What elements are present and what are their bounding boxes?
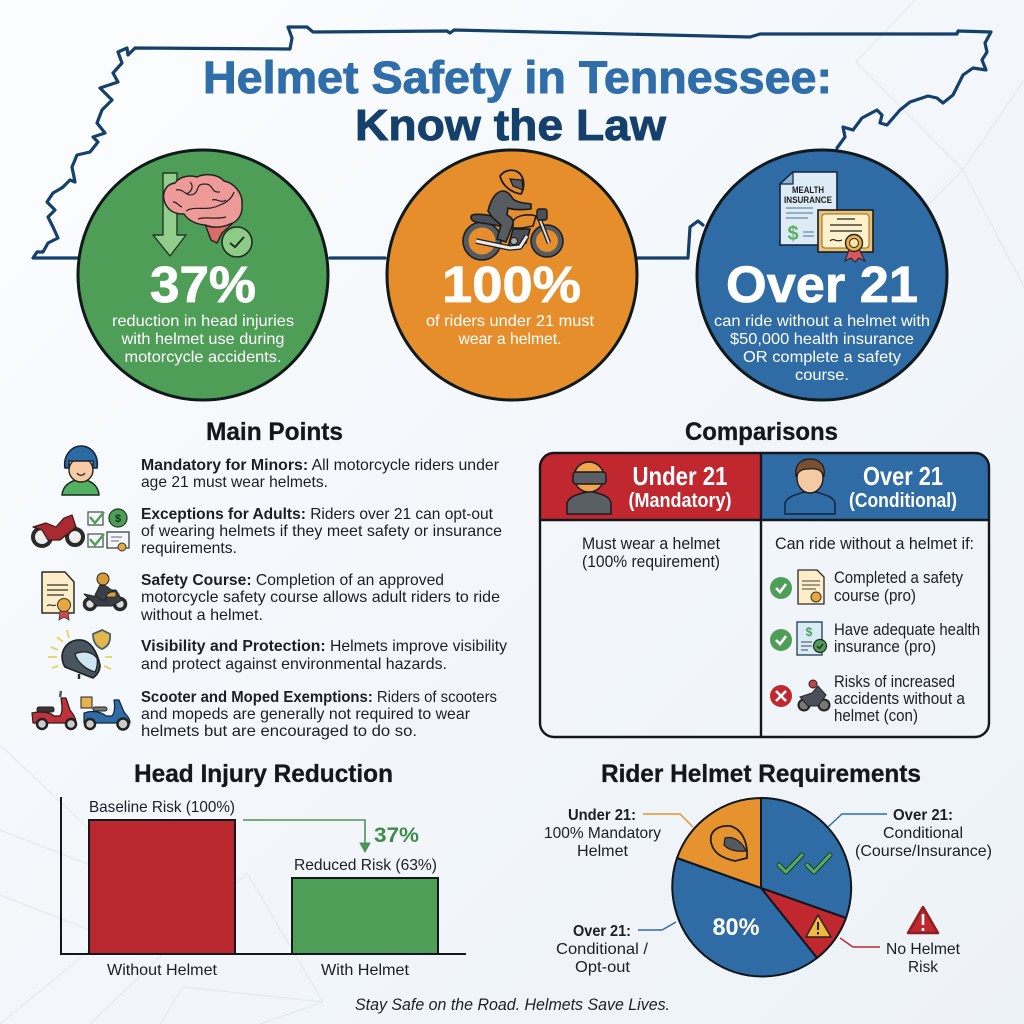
- bar: with helmet: [292, 878, 438, 954]
- text: scooter and moped exemptions: [141, 689, 497, 740]
- text: scooter and moped exemptions: helmets but are encouraged to do so.: [141, 723, 417, 740]
- row: health insurance pro: Have adequate health: [834, 621, 980, 639]
- row: health insurance pro: $: [806, 625, 813, 639]
- icon: rider over 21: [785, 459, 835, 514]
- label: no helmet risk: Risk: [908, 959, 939, 976]
- stat circle: Over 21: [697, 150, 947, 400]
- caption: motorcycle accidents.: [124, 349, 282, 366]
- title: Know the Law: [355, 101, 667, 150]
- caption: can ride without a helmet with: [714, 313, 930, 330]
- icon: health insurance document: INSURANCE: [784, 195, 832, 205]
- bar: without helmet: [89, 820, 235, 954]
- text: must wear a helmet: Must wear a helmet: [582, 535, 720, 553]
- column header: under 21: (Mandatory): [628, 490, 732, 512]
- stat circle: 37%: [78, 150, 328, 400]
- icon: certificate and rider: [42, 572, 126, 620]
- slice: no helmet risk: [761, 888, 846, 958]
- label: over 21 course and insurance: Over 21:: [893, 807, 953, 824]
- text: exceptions for adults: of wearing helmets if they meet safety or insurance: [141, 523, 502, 540]
- slice: over 21 course and insurance: [761, 798, 851, 918]
- label: no helmet risk: No Helmet: [886, 941, 961, 958]
- icon: health insurance document: [780, 172, 837, 245]
- icon: motorcycle with checklist: [33, 509, 129, 551]
- heading: comparisons: Comparisons: [685, 418, 838, 446]
- slice: under 21: [677, 798, 761, 888]
- label: baseline risk: Baseline Risk (100%): [89, 799, 235, 816]
- icon: motorcycle with checklist: $: [115, 513, 121, 525]
- figure: 37%: 37%: [150, 256, 256, 313]
- caption: wear a helmet.: [458, 331, 562, 348]
- text: must wear a helmet: (100% requirement): [582, 553, 720, 571]
- heading: rider helmet requirements: Rider Helmet Requirements: [601, 760, 921, 788]
- text: mandatory for minors: [141, 457, 500, 491]
- column header: over 21: (Conditional): [849, 490, 957, 512]
- title: [203, 52, 832, 150]
- caption: $50,000 health insurance: [730, 331, 914, 348]
- label: over 21 opt-out: [556, 922, 676, 976]
- icon: brain: [164, 175, 242, 243]
- text: mandatory for minors: age 21 must wear helmets.: [141, 474, 328, 491]
- row: safety course pro: [770, 569, 964, 605]
- panel: comparison table: [540, 453, 989, 737]
- row: health insurance pro: [770, 621, 980, 656]
- text: exceptions for adults: [141, 506, 502, 557]
- row: increased accidents con: Risks of increased: [834, 673, 955, 691]
- label: under 21: Helmet: [577, 843, 629, 860]
- icon: check badge: [222, 227, 252, 257]
- text: safety course: without a helmet.: [140, 607, 263, 624]
- text: scooter and moped exemptions: and mopeds are generally not required to wear: [141, 706, 471, 723]
- title: Helmet Safety in Tennessee:: [203, 52, 832, 103]
- figure: 100%: 100%: [442, 256, 581, 313]
- icon: rider under 21: [567, 462, 611, 514]
- stat circle: 100%: [387, 150, 637, 400]
- caption: reduction in head injuries: [112, 313, 294, 330]
- column header: over 21: Over 21: [863, 461, 943, 491]
- caption: course.: [795, 367, 849, 384]
- arrow: reduction: [243, 820, 370, 852]
- caption: [426, 313, 595, 348]
- heading: main points: Main Points: [206, 418, 343, 446]
- label: without helmet: Without Helmet: [107, 962, 218, 979]
- pie chart: rider helmet requirements: [544, 798, 992, 976]
- column header: under 21: Under 21: [632, 461, 728, 491]
- slice: over 21 opt-out: [672, 858, 817, 976]
- icon: rider with blue helmet: [62, 446, 99, 495]
- icon: helmet with shield: [48, 630, 112, 679]
- caption: of riders under 21 must: [426, 313, 595, 330]
- label: reduced risk: Reduced Risk (63%): [294, 857, 437, 874]
- icon: scooters: [32, 691, 130, 730]
- column header: under 21: [628, 461, 732, 512]
- row: increased accidents con: helmet (con): [834, 707, 918, 725]
- row: safety course pro: course (pro): [834, 587, 916, 605]
- row: safety course pro: Completed a safety: [834, 569, 964, 587]
- icon: down arrow: [153, 173, 186, 256]
- panel: main points: [32, 418, 507, 740]
- icon: small warning: [806, 915, 831, 937]
- label: over 21 opt-out: Opt-out: [575, 959, 631, 976]
- caption: [112, 313, 294, 366]
- text: visibility and protection: and protect against environmental hazards.: [141, 656, 447, 673]
- label: over 21 opt-out: Conditional /: [556, 941, 649, 958]
- column header: over 21: [849, 461, 957, 512]
- label: 37%: 37%: [374, 824, 419, 847]
- label: over 21 opt-out: Over 21:: [573, 923, 631, 940]
- text: must wear a helmet: [582, 535, 720, 571]
- text: safety course: Safety Course: Completion of an approved: [141, 572, 444, 589]
- footer tagline: Stay Safe on the Road. Helmets Save Lives.: [355, 995, 670, 1014]
- icon: large warning: [908, 907, 938, 933]
- icon: health insurance document: MEALTH: [792, 185, 824, 195]
- text: can ride without a helmet if: Can ride without a helmet if:: [775, 535, 974, 553]
- label: no helmet risk: [840, 938, 961, 976]
- icon: helmet in slice: [711, 826, 747, 861]
- caption: OR complete a safety: [743, 349, 901, 366]
- row: increased accidents con: accidents without a: [834, 690, 966, 708]
- label: with helmet: With Helmet: [321, 962, 410, 979]
- label: over 21 course and insurance: [828, 807, 992, 860]
- text: exceptions for adults: requirements.: [141, 540, 237, 557]
- bar chart: head injury reduction: [61, 797, 466, 979]
- label: over 21 course and insurance: Conditional: [883, 825, 963, 842]
- row: increased accidents con: [770, 673, 966, 725]
- caption: with helmet use during: [120, 331, 285, 348]
- icon: check marks: [779, 855, 830, 872]
- text: scooter and moped exemptions: Scooter and Moped Exemptions: Riders of scooters: [141, 689, 497, 706]
- label: under 21: Under 21:: [568, 807, 636, 824]
- caption: [714, 313, 930, 384]
- text: exceptions for adults: Exceptions for Adults: Riders over 21 can opt-out: [141, 506, 494, 523]
- text: safety course: motorcycle safety course allows adult riders to ride: [141, 589, 500, 606]
- text: visibility and protection: [141, 638, 507, 673]
- icon: motorcycle rider: [463, 170, 563, 260]
- label: under 21: [544, 807, 693, 860]
- icon: health insurance document: $: [787, 223, 799, 245]
- label: over 21 course and insurance: (Course/Insurance): [855, 843, 992, 860]
- heading: head injury reduction: Head Injury Reduction: [134, 760, 393, 788]
- Tennessee state outline: [33, 27, 991, 258]
- icon: certificate: [818, 210, 873, 262]
- text: mandatory for minors: Mandatory for Minors: All motorcycle riders under: [141, 457, 500, 474]
- text: safety course: [140, 572, 500, 624]
- row: health insurance pro: insurance (pro): [834, 638, 936, 656]
- label: 80%: 80%: [712, 914, 760, 941]
- figure: Over 21: Over 21: [726, 256, 918, 313]
- text: visibility and protection: Visibility and Protection: Helmets improve visibility: [141, 638, 507, 655]
- label: under 21: 100% Mandatory: [544, 825, 661, 842]
